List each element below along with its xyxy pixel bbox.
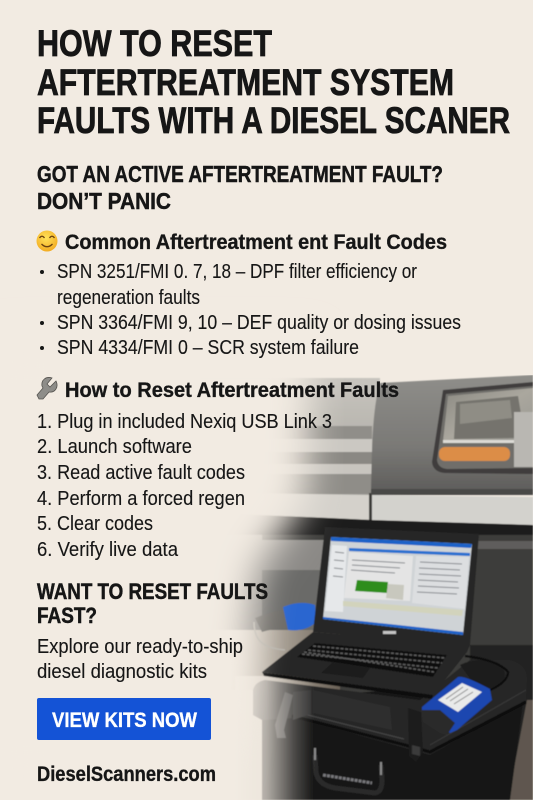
case left fade	[235, 676, 315, 800]
laptop base	[262, 632, 470, 695]
headlight	[432, 382, 533, 474]
screen	[323, 537, 472, 635]
fault code list: SPN 3364/FMI 9, 10 – DEF quality or dosing issues	[57, 312, 461, 334]
heading: common fault codes: Common Aftertreatment ent Fault Codes	[65, 231, 447, 254]
hard case	[253, 656, 527, 800]
call to action heading: WANT TO RESET FAULTS	[37, 579, 268, 604]
case body	[262, 680, 526, 800]
reset steps list: 6. Verify live data	[37, 539, 179, 561]
lid roller	[313, 690, 392, 730]
icon: wrench	[37, 377, 57, 399]
truck fender	[371, 375, 533, 495]
fade: photo into cream background	[0, 340, 312, 790]
reset steps list: 5. Clear codes	[37, 513, 153, 535]
keyboard	[297, 643, 447, 677]
reset steps list: 3. Read active fault codes	[37, 462, 245, 484]
case latches	[275, 692, 293, 738]
call to action text: Explore our ready-to-ship	[37, 636, 243, 658]
hump and cable	[460, 660, 505, 692]
heading: how to reset: How to Reset Aftertreatment Faults	[65, 379, 399, 402]
photo: truck front with laptop and scan tool	[180, 375, 533, 800]
subheading	[37, 161, 443, 214]
case handle	[315, 755, 382, 793]
button: view kits now: VIEW KITS NOW	[52, 709, 197, 732]
icon: smiling face	[36, 230, 58, 252]
call to action text	[37, 636, 243, 683]
call to action heading: FAST?	[37, 603, 97, 628]
device connector	[421, 710, 455, 735]
title: HOW TO RESET	[37, 22, 272, 64]
bezel	[313, 527, 479, 645]
call to action text: diesel diagnostic kits	[37, 661, 207, 683]
truck grille area	[200, 378, 380, 503]
lower truck panel	[200, 512, 533, 800]
touchpad	[321, 663, 370, 678]
laptop	[262, 527, 479, 699]
call to action heading	[37, 579, 268, 628]
title	[37, 22, 510, 141]
blue cable plug	[254, 603, 316, 650]
button: view kits now	[37, 698, 211, 740]
bumper	[180, 489, 533, 525]
reset steps list: 2. Launch software	[37, 436, 192, 458]
reset steps list: 1. Plug in included Nexiq USB Link 3	[37, 411, 332, 433]
case lid	[253, 660, 527, 755]
website: DieselScanners.com	[37, 763, 216, 786]
reset steps list: 4. Perform a forced regen	[37, 488, 245, 510]
amber marker	[439, 447, 510, 461]
Nexiq USB Link device	[421, 677, 492, 735]
fault code list: SPN 3251/FMI 0. 7, 18 – DPF filter efficiency or	[57, 261, 417, 283]
fault code list: regeneration faults	[57, 287, 200, 309]
subheading: DON’T PANIC	[37, 188, 171, 214]
logo on bezel	[383, 631, 396, 634]
fault code list	[40, 261, 461, 359]
device label	[438, 683, 482, 712]
fault code list: SPN 4334/FMI 0 – SCR system failure	[57, 337, 359, 359]
reset steps list	[37, 411, 332, 561]
subheading: GOT AN ACTIVE AFTERTREATMENT FAULT?	[37, 161, 443, 187]
